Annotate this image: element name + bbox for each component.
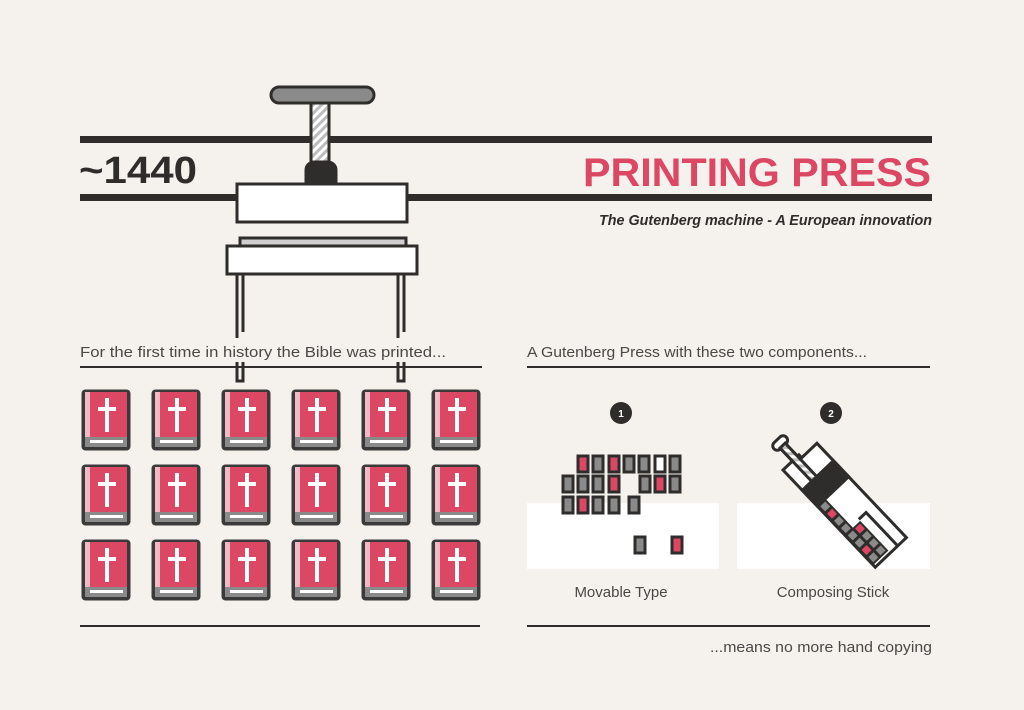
bible grid — [82, 390, 480, 600]
panel: composing stick — [737, 402, 930, 601]
panel: composing stick: Composing Stick — [777, 584, 890, 601]
badge 1 — [610, 402, 632, 424]
icon: type blocks — [563, 456, 682, 553]
badge 1: 1 — [618, 409, 624, 420]
icon: composing stick — [765, 422, 906, 567]
text: right heading: A Gutenberg Press with these two components... — [527, 344, 867, 361]
icon: printing press — [227, 87, 417, 381]
text: footer: ...means no more hand copying — [710, 639, 932, 656]
year: ~1440 — [79, 150, 197, 192]
badge 2: 2 — [828, 409, 834, 420]
subtitle: The Gutenberg machine - A European innovation — [599, 212, 932, 229]
panel: movable type: Movable Type — [574, 584, 668, 601]
title: PRINTING PRESS — [583, 151, 931, 195]
header lines — [80, 136, 932, 201]
panel: movable type — [527, 402, 719, 601]
text: left heading: For the first time in history the Bible was printed... — [80, 344, 446, 361]
bottom lines — [80, 625, 930, 627]
badge 2 — [820, 402, 842, 424]
